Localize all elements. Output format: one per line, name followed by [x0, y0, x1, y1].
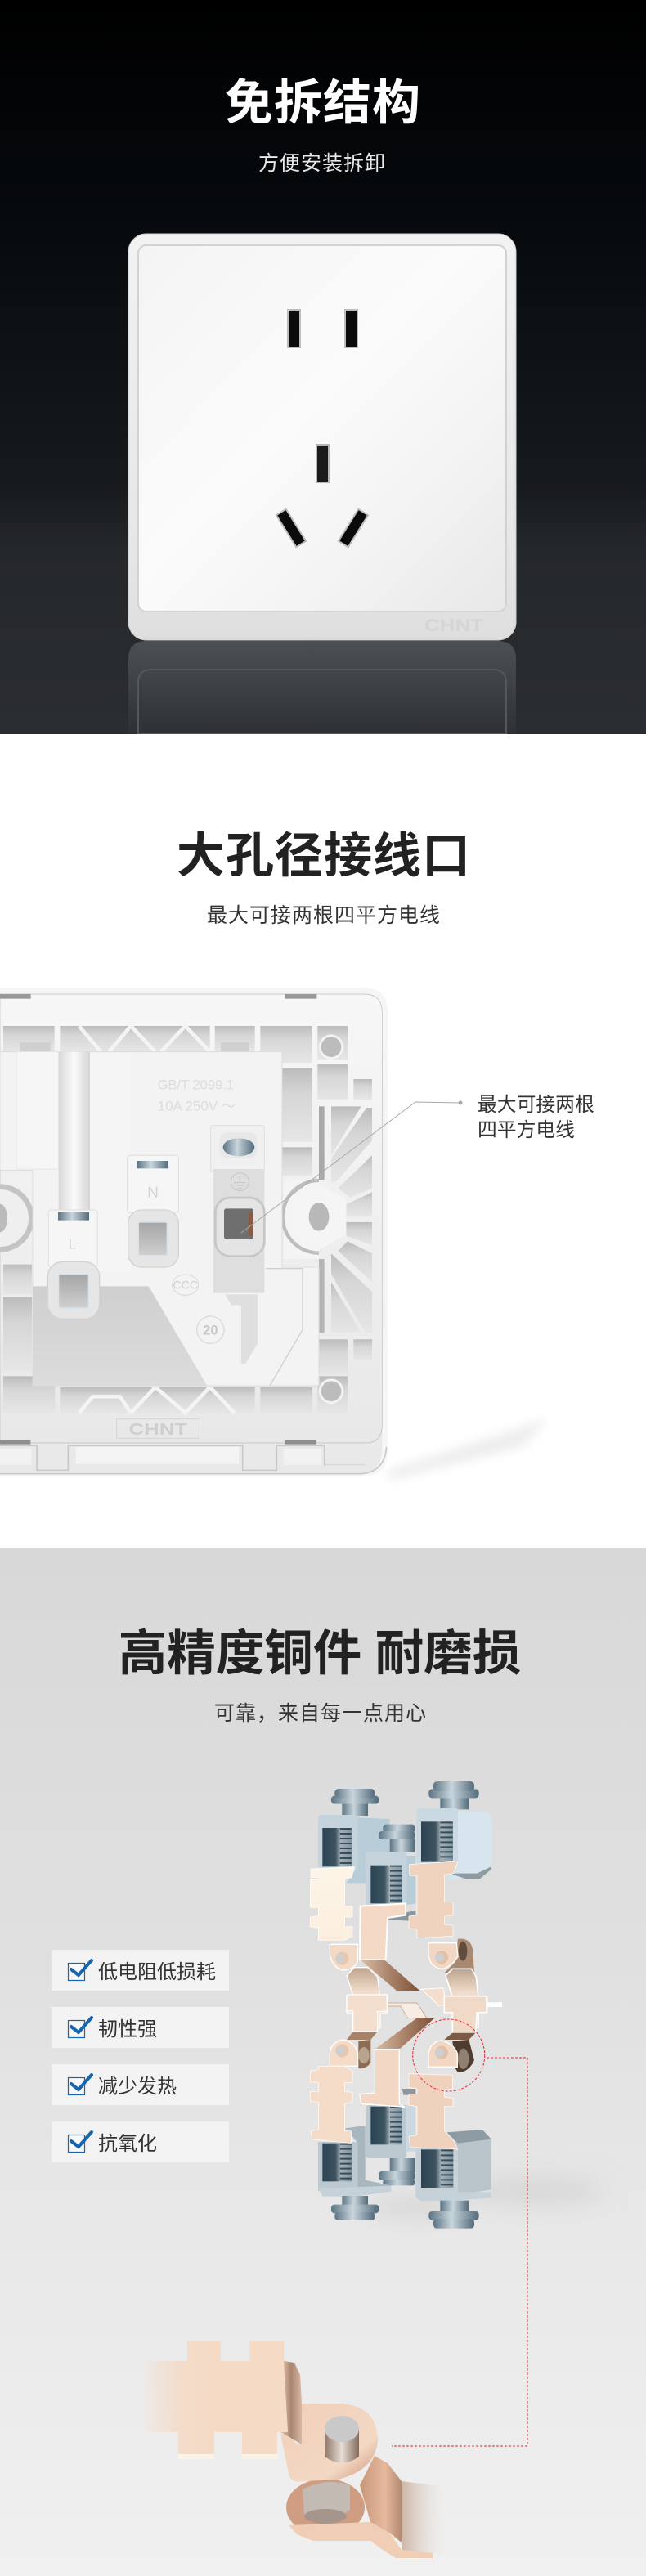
copper stem: right — [421, 1969, 502, 2027]
mark: CHNT logo: CHNT — [128, 1420, 188, 1439]
socket rear view — [0, 988, 388, 1476]
copper blade: upper middle — [360, 1903, 406, 1960]
subtitle: 可靠，来自每一点用心: 可靠，来自每一点用心 — [214, 1702, 427, 1725]
socket hole: angled left — [276, 509, 306, 547]
steel clamp: lower middle — [366, 2089, 415, 2185]
copper lower bracket — [286, 2456, 446, 2558]
callout text — [478, 1094, 594, 1141]
callout text: 最大可接两根 — [478, 1094, 594, 1116]
socket hole: upper left — [288, 310, 300, 347]
floor shadow under metal assembly — [368, 2176, 605, 2215]
label: N: N — [147, 1185, 159, 1202]
copper blade: lower right — [409, 2074, 458, 2149]
rating text: 10A 250V ～ — [158, 1099, 236, 1114]
panel: copper parts section — [0, 1548, 646, 2576]
floor shadow of socket — [384, 1418, 548, 1480]
copper stem: left — [347, 1968, 387, 2027]
socket hole: upper right — [345, 310, 357, 347]
rating text: GB/T 2099.1 — [158, 1077, 234, 1093]
logo on panel: CHNT — [424, 616, 483, 635]
mark: CCC: CCC — [173, 1279, 198, 1292]
terminal: earth — [211, 1126, 264, 1293]
feature list — [52, 1950, 229, 2162]
steel clamp: lower right — [415, 2130, 491, 2229]
copper lug with rod — [280, 2404, 378, 2482]
copper lug and spring: upper right — [428, 1939, 474, 1973]
socket hole: centre earth — [316, 445, 329, 482]
socket hole: angled right — [339, 509, 368, 547]
feature: 低电阻低损耗: 低电阻低损耗 — [98, 1961, 216, 1983]
reflection of the socket panel — [128, 641, 516, 734]
title: 大孔径接线口: 大孔径接线口 — [177, 829, 471, 883]
copper link: centre — [388, 2003, 427, 2018]
screw: upper left — [331, 1789, 379, 1816]
feature: 低电阻低损耗 — [52, 1950, 229, 1991]
steel clamp: upper middle — [366, 1825, 415, 1921]
mark: 20 year — [197, 1316, 224, 1343]
feature: 抗氧化: 抗氧化 — [98, 2133, 157, 2155]
feature: 韧性强: 韧性强 — [98, 2018, 157, 2041]
panel: white wiring port section — [0, 734, 646, 1548]
highlight circle on contact — [413, 2019, 485, 2091]
copper and steel terminal assembly: upper half — [310, 1781, 502, 2027]
copper lug: lower left — [330, 2040, 357, 2066]
enlarged copper contact detail — [144, 2341, 446, 2558]
feature: 抗氧化 — [52, 2121, 229, 2162]
feature: 韧性强 — [52, 2007, 229, 2048]
title: 免拆结构: 免拆结构 — [225, 76, 421, 130]
mark: CHNT logo — [117, 1419, 200, 1439]
copper curved: lower left — [347, 1995, 387, 2068]
steel clamp: upper left — [318, 1815, 415, 1905]
mark: CCC — [173, 1275, 199, 1295]
copper link diagonal — [361, 1960, 419, 1991]
mark: 20 year: 20 — [203, 1323, 218, 1338]
callout text: 四平方电线 — [478, 1119, 575, 1141]
title: 高精度铜件 耐磨损: 高精度铜件 耐磨损 — [119, 1626, 521, 1681]
socket panel front view — [128, 234, 516, 640]
feature: 减少发热: 减少发热 — [98, 2076, 177, 2098]
copper stem and curve: lower right — [428, 1996, 487, 2072]
copper blade: upper left — [310, 1866, 354, 1940]
steel clamp: upper right — [416, 1808, 491, 1879]
dashed connector to enlarged detail — [392, 2058, 527, 2446]
terminal: neutral N — [128, 1155, 178, 1267]
copper upper blade — [144, 2341, 302, 2459]
screw: upper right — [428, 1781, 479, 1809]
steel clamp: lower left — [318, 2126, 391, 2220]
copper blade: lower left — [310, 2066, 352, 2144]
subtitle: 方便安装拆卸: 方便安装拆卸 — [258, 152, 386, 175]
panel: dark hero section — [0, 0, 646, 734]
copper and steel terminal assembly: lower half — [310, 1995, 491, 2229]
label: L: L — [69, 1236, 76, 1252]
callout: leader line to terminal — [241, 1100, 463, 1233]
terminal: live L — [47, 1210, 100, 1319]
copper blade: lower middle — [360, 2018, 435, 2107]
copper lug: upper left — [330, 1944, 357, 1970]
copper blade: upper right — [409, 1861, 458, 1938]
subtitle: 最大可接两根四平方电线: 最大可接两根四平方电线 — [207, 904, 441, 927]
rating text — [158, 1077, 236, 1114]
feature: 减少发热 — [52, 2064, 229, 2105]
